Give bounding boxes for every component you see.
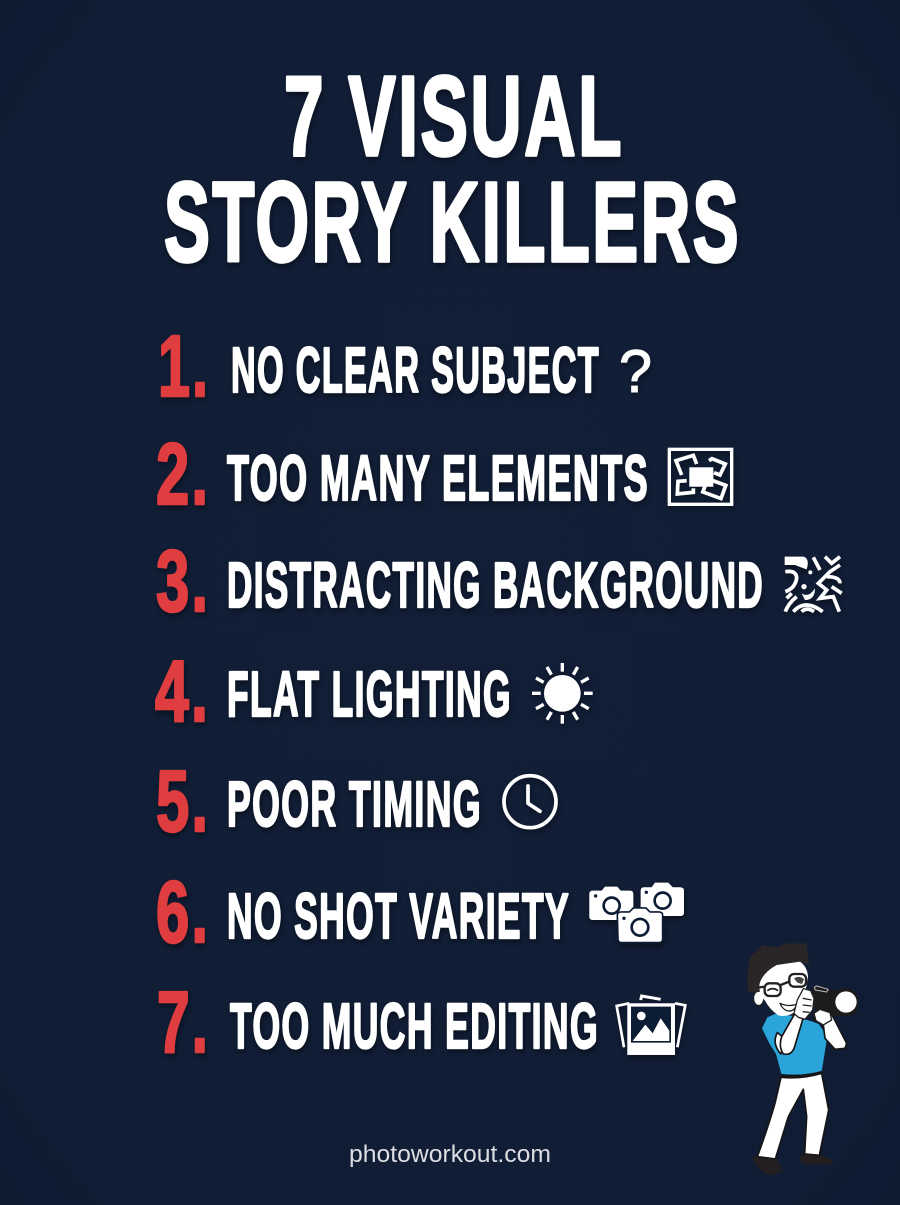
list item 5: poor timing: 5. [156,753,210,850]
list item 3: distracting background: 3. [156,533,210,630]
ear [754,991,764,1005]
list item 6: no shot variety: NO SHOT VARIETY [227,880,570,952]
list item 4: flat lighting: FLAT LIGHTING [227,658,512,730]
list item 2: too many elements: 2. [156,426,210,523]
title: 7 VISUAL [284,53,624,179]
list item 6: no shot variety: 6. [156,864,210,961]
camera [808,986,859,1016]
icon: sun [532,663,593,724]
list item 1: no clear subject: ? [619,338,652,405]
raised arm [780,1013,803,1054]
lower arm [813,1012,847,1049]
list item 4: flat lighting: 4. [155,643,210,740]
footer website: photoworkout.com [349,1141,551,1168]
glasses [759,981,791,987]
title [164,53,741,285]
pants and legs [757,1073,829,1159]
icon: clock [504,776,556,828]
list item 3: distracting background [156,533,842,630]
icon: scattered photos [669,449,732,504]
shoes [753,1155,833,1176]
sleeve cuff [775,1033,787,1054]
face [759,962,808,1016]
photographer character [747,943,859,1176]
hair [747,943,809,993]
shirt [762,1014,827,1076]
list item 5: poor timing: POOR TIMING [227,768,482,840]
icon: photo stack [617,996,685,1055]
icon: busy pattern [785,557,842,612]
list item 5: poor timing [156,753,556,850]
smile [780,1003,797,1011]
list item 2: too many elements [156,426,732,523]
icon: cameras [589,883,684,943]
list item 7: too much editing [157,974,685,1071]
lower hand [814,1009,832,1025]
list item 4: flat lighting [155,643,593,740]
list item 1: no clear subject [158,318,652,415]
list item 7: too much editing: TOO MUCH EDITING [230,990,599,1062]
list item 6: no shot variety [156,864,684,961]
upper hand [794,989,814,1019]
list item 1: no clear subject: 1. [158,318,210,415]
list item 7: too much editing: 7. [157,974,210,1071]
